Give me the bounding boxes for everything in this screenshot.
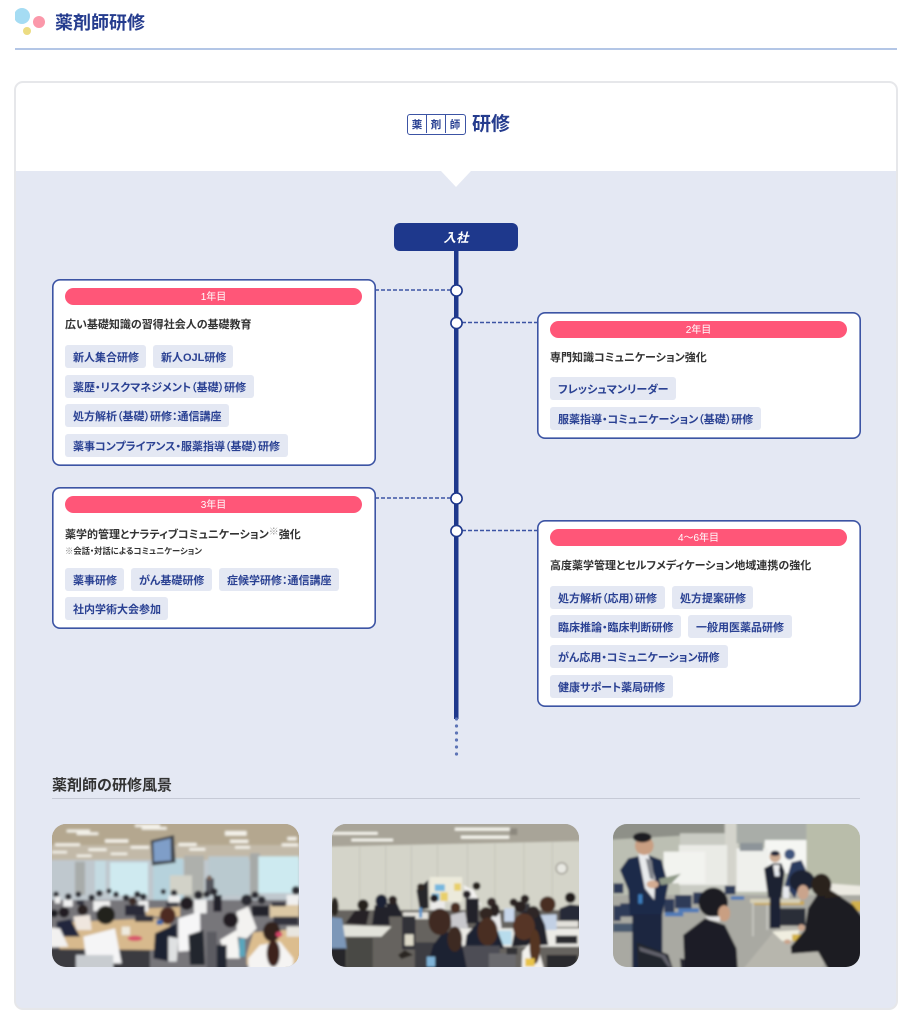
badge: 薬剤師 — [407, 114, 466, 135]
year label — [550, 321, 847, 338]
photo: lecture room — [52, 824, 299, 967]
start pill: 入社 — [394, 223, 518, 251]
tag: 処方解析（基礎）研修：通信講座 — [73, 411, 222, 423]
section heading: 薬剤師の研修風景 — [52, 777, 172, 794]
icon: three dots — [15, 8, 45, 35]
card heading: 高度薬学管理とセルフメディケーション地域連携の強化 — [550, 560, 811, 572]
tag: 処方提案研修 — [680, 593, 746, 605]
tag: 社内学術大会参加 — [73, 604, 161, 616]
page title: 薬剤師研修 — [55, 13, 145, 33]
tag: 処方解析（応用）研修 — [558, 593, 657, 605]
tag — [65, 434, 288, 457]
card: year 1 — [52, 279, 376, 466]
year label — [65, 496, 362, 513]
badge: 薬剤師: 剤 — [431, 119, 441, 131]
panel title — [407, 114, 510, 135]
card heading: 専門知識コミュニケーション強化 — [550, 352, 707, 364]
tag — [65, 597, 168, 620]
tag: 臨床推論・臨床判断研修 — [558, 622, 674, 634]
connector year 2 — [451, 317, 537, 329]
card: year 2 — [537, 312, 861, 439]
card: year 3 — [52, 487, 376, 629]
timeline — [376, 251, 537, 756]
start pill: 入社: 入社 — [443, 231, 468, 245]
year label — [65, 288, 362, 305]
tag: がん応用・コミュニケーション研修 — [558, 652, 720, 664]
tag: 薬事研修 — [73, 575, 117, 587]
heading: 研修: 研修 — [472, 114, 510, 135]
photo: group presentation — [332, 824, 579, 967]
tag: 新人集合研修 — [73, 352, 139, 364]
tag — [65, 345, 146, 368]
card: years 4-6 — [537, 520, 861, 707]
tag: 薬歴・リスクマネジメント（基礎）研修 — [73, 382, 246, 394]
timeline spine — [454, 245, 458, 719]
tag: フレッシュマンリーダー — [558, 384, 668, 396]
tag: がん基礎研修 — [139, 575, 204, 587]
tag — [219, 568, 339, 591]
photo: role play — [613, 824, 860, 967]
panel header band — [16, 83, 896, 171]
tag — [131, 568, 212, 591]
tag — [688, 615, 792, 638]
page header — [15, 0, 897, 50]
tag — [672, 586, 753, 609]
year label: 3年目 — [201, 500, 226, 511]
tag: 健康サポート薬局研修 — [558, 682, 665, 694]
section heading — [52, 774, 860, 799]
continuation dots — [455, 717, 458, 756]
tag — [65, 404, 229, 427]
footnote: ※会話・対話によるコミュニケーション — [65, 546, 202, 556]
tag — [550, 675, 673, 698]
tag: 一般用医薬品研修 — [696, 622, 784, 634]
year label: 4〜6年目 — [678, 533, 719, 544]
tag — [550, 407, 761, 430]
connector year 3 — [375, 493, 462, 504]
connector years 4-6 — [451, 525, 537, 537]
tag — [550, 377, 676, 400]
tag: 新人OJL研修 — [161, 352, 226, 364]
badge: 薬剤師: 薬 — [412, 119, 422, 131]
tag — [550, 586, 665, 609]
card heading: 広い基礎知識の習得社会人の基礎教育 — [65, 319, 252, 331]
badge: 薬剤師: 師 — [450, 119, 460, 131]
tag — [550, 615, 681, 638]
year label: 1年目 — [201, 292, 226, 303]
year label: 2年目 — [686, 325, 711, 336]
year label — [550, 529, 847, 546]
card heading: 薬学的管理とナラティブコミュニケーション※強化 — [65, 527, 301, 541]
tag: 症候学研修：通信講座 — [227, 575, 332, 587]
tag — [153, 345, 233, 368]
tag — [65, 375, 254, 398]
tag: 薬事コンプライアンス・服薬指導（基礎）研修 — [73, 441, 280, 453]
tag — [550, 645, 728, 668]
tag — [65, 568, 124, 591]
notch — [441, 171, 471, 187]
connector year 1 — [375, 285, 462, 296]
tag: 服薬指導・コミュニケーション（基礎）研修 — [558, 414, 753, 426]
